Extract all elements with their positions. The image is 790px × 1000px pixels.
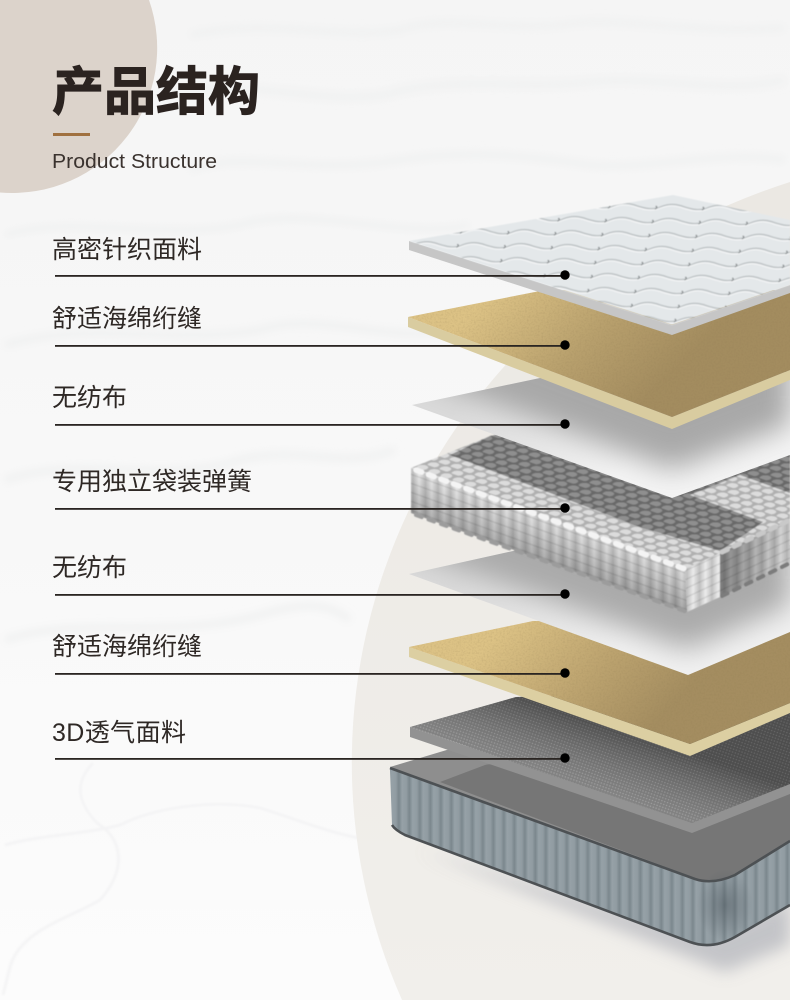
springs left face: [411, 468, 687, 612]
springs top, dark central area: [450, 370, 790, 551]
fabric quilted top: [409, 195, 790, 325]
layer: pocket springs: [411, 370, 790, 612]
callout: non-woven fabric: [52, 384, 570, 429]
mattress corner shading: [697, 869, 753, 941]
mattress ground shadow: [420, 850, 790, 972]
foam grain: [408, 290, 790, 417]
mattress quilted side: [390, 769, 790, 945]
callout: pocket springs: [52, 468, 570, 513]
mesh side: [410, 727, 790, 833]
foam top: [409, 620, 790, 744]
callout: comfort foam: 舒适海绵绗缝: [52, 305, 202, 333]
layer: lower comfort foam: [409, 620, 790, 756]
mattress piping: [390, 768, 790, 945]
title: 产品结构: [52, 64, 260, 122]
subtitle: Product Structure: [52, 150, 217, 173]
layer: upper non-woven fabric: [412, 372, 790, 498]
callout: comfort foam lower: 舒适海绵绗缝: [52, 633, 202, 661]
mattress base: [390, 700, 790, 972]
springs right face cylinder tops: [722, 520, 790, 552]
mesh shading: [410, 690, 790, 823]
layer: upper comfort foam: [408, 290, 790, 429]
foam side: [408, 317, 790, 429]
layer: lower non-woven fabric: [410, 545, 790, 675]
springs left face cylinder tops: [416, 470, 685, 569]
layer: knit top fabric: [409, 195, 790, 335]
callout: 3D mesh fabric: 3D透气面料: [52, 719, 186, 747]
background shape: large beige circle: [352, 182, 790, 1000]
springs right face scalloped bottom: [722, 563, 790, 596]
callout: knit fabric: 高密针织面料: [52, 236, 202, 264]
springs left face scalloped bottom: [416, 515, 687, 612]
layer: 3D mesh fabric: [410, 690, 790, 833]
mattress top surface: [390, 700, 790, 881]
title accent rule: [53, 133, 90, 136]
callout: non-woven fabric: 无纺布: [52, 384, 127, 412]
mesh top: [410, 690, 790, 823]
callout: 3D mesh fabric: [52, 719, 570, 763]
background shape: top-left beige circle: [0, 0, 157, 193]
callout: non-woven fabric lower: [52, 554, 570, 599]
fabric side: [409, 241, 790, 335]
callout: pocket springs: 专用独立袋装弹簧: [52, 468, 252, 496]
foam grain: [409, 620, 790, 744]
callout: knit fabric: [52, 236, 570, 280]
springs right face: [720, 520, 790, 597]
mattress dark inset: [440, 700, 790, 881]
springs front end: [685, 553, 720, 612]
callout: comfort foam lower: [52, 633, 570, 678]
callout: comfort foam: [52, 305, 570, 350]
callout: non-woven fabric lower: 无纺布: [52, 554, 127, 582]
foam top: [408, 290, 790, 417]
springs top, light band: [411, 370, 790, 569]
foam side: [409, 647, 790, 756]
